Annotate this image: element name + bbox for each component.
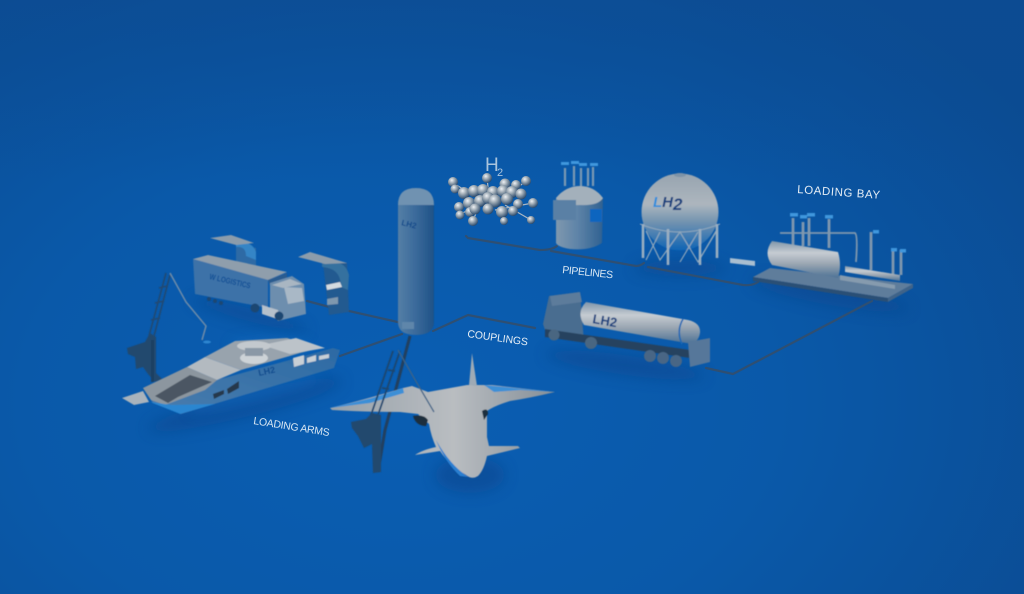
label: H2: H — [485, 155, 499, 176]
label: loading arms: LOADING ARMS — [253, 415, 330, 439]
ferry — [122, 338, 340, 414]
loading arm: ferry side — [127, 273, 211, 382]
spherical LH2 tank — [640, 173, 720, 265]
truck lettering: W LOGISTICS — [209, 272, 252, 291]
truck: logistics lorry — [193, 255, 306, 321]
label: loading bay: LOADING BAY — [797, 184, 881, 202]
tanker lettering: LH2 — [591, 311, 618, 330]
tanker truck — [543, 292, 710, 367]
loading bay equipment — [730, 213, 913, 302]
kiosk: rear fuelling station — [210, 235, 256, 268]
hydrogen molecule cluster — [448, 173, 538, 226]
pipelines — [307, 236, 872, 374]
tank lettering: 2 — [672, 195, 683, 214]
storage column — [398, 188, 434, 335]
loading arm: aircraft side, rear mast — [351, 336, 410, 473]
label: H2: 2 — [497, 167, 503, 179]
ground shadows — [145, 260, 911, 493]
column lettering: LH2 — [401, 218, 418, 231]
cryogenic vessel — [553, 161, 603, 249]
aircraft — [330, 350, 555, 478]
tank lettering: LH — [653, 194, 673, 211]
label: H2 — [485, 155, 503, 179]
kiosk: fuelling station — [298, 252, 349, 315]
ferry lettering: LH2 — [257, 365, 276, 378]
light reflections on floor — [186, 339, 324, 418]
label: couplings: COUPLINGS — [467, 328, 529, 348]
label: pipelines: PIPELINES — [562, 264, 614, 281]
